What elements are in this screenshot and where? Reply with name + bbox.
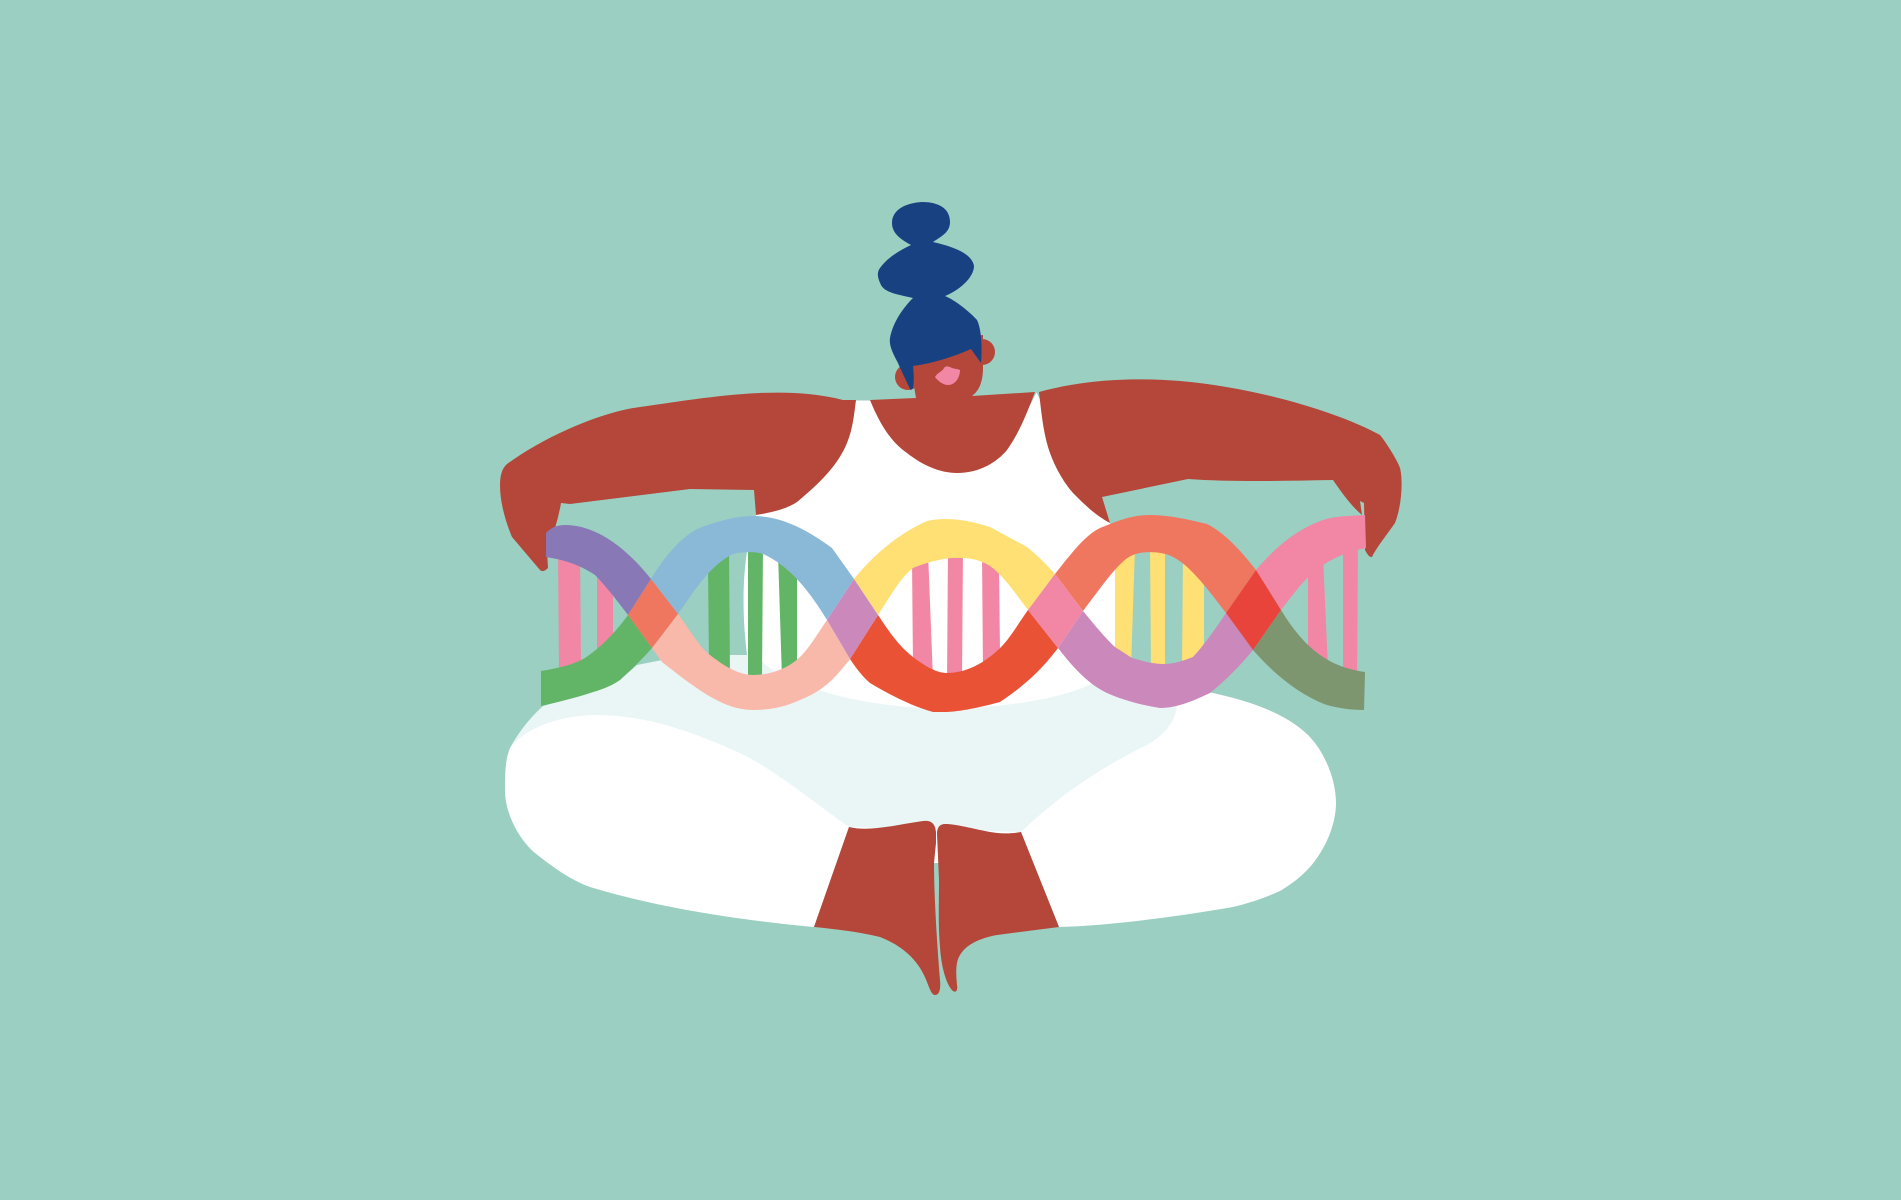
crossover: bright red (1226, 570, 1281, 650)
upper strand: blue (651, 516, 854, 620)
rungs: right pink (1308, 540, 1358, 681)
upper strand: pink (1256, 515, 1366, 610)
rungs: yellow (1115, 542, 1204, 674)
figure: woman (500, 202, 1402, 995)
lower strand: red (850, 610, 1058, 712)
rungs: left pink (558, 550, 613, 672)
right foot (937, 824, 1059, 992)
hair bun (878, 202, 982, 390)
DNA helix (541, 515, 1366, 712)
ear right (969, 339, 995, 365)
right arm (1039, 379, 1402, 557)
left arm (500, 393, 856, 571)
lower strand: green (541, 615, 652, 706)
upper strand: orange (1055, 515, 1256, 613)
chest, neck and face (870, 335, 1035, 473)
left foot (814, 821, 940, 995)
rungs: green (708, 545, 797, 682)
lower strand: violet (1058, 611, 1253, 708)
torso tank top (744, 392, 1240, 863)
shorts shadow (510, 655, 1177, 832)
left leg (505, 715, 849, 927)
crossover: rose (1028, 574, 1083, 648)
crossover: coral (628, 579, 678, 648)
mouth (935, 366, 960, 385)
upper strand: yellow (854, 519, 1055, 615)
crossover: orchid (827, 579, 878, 659)
rungs: centre pink (912, 548, 1000, 683)
upper strand: purple (546, 525, 651, 615)
lower strand: salmon (652, 614, 850, 710)
right leg (1021, 690, 1336, 927)
lower strand: olive (1253, 610, 1365, 710)
ear left (895, 364, 921, 390)
